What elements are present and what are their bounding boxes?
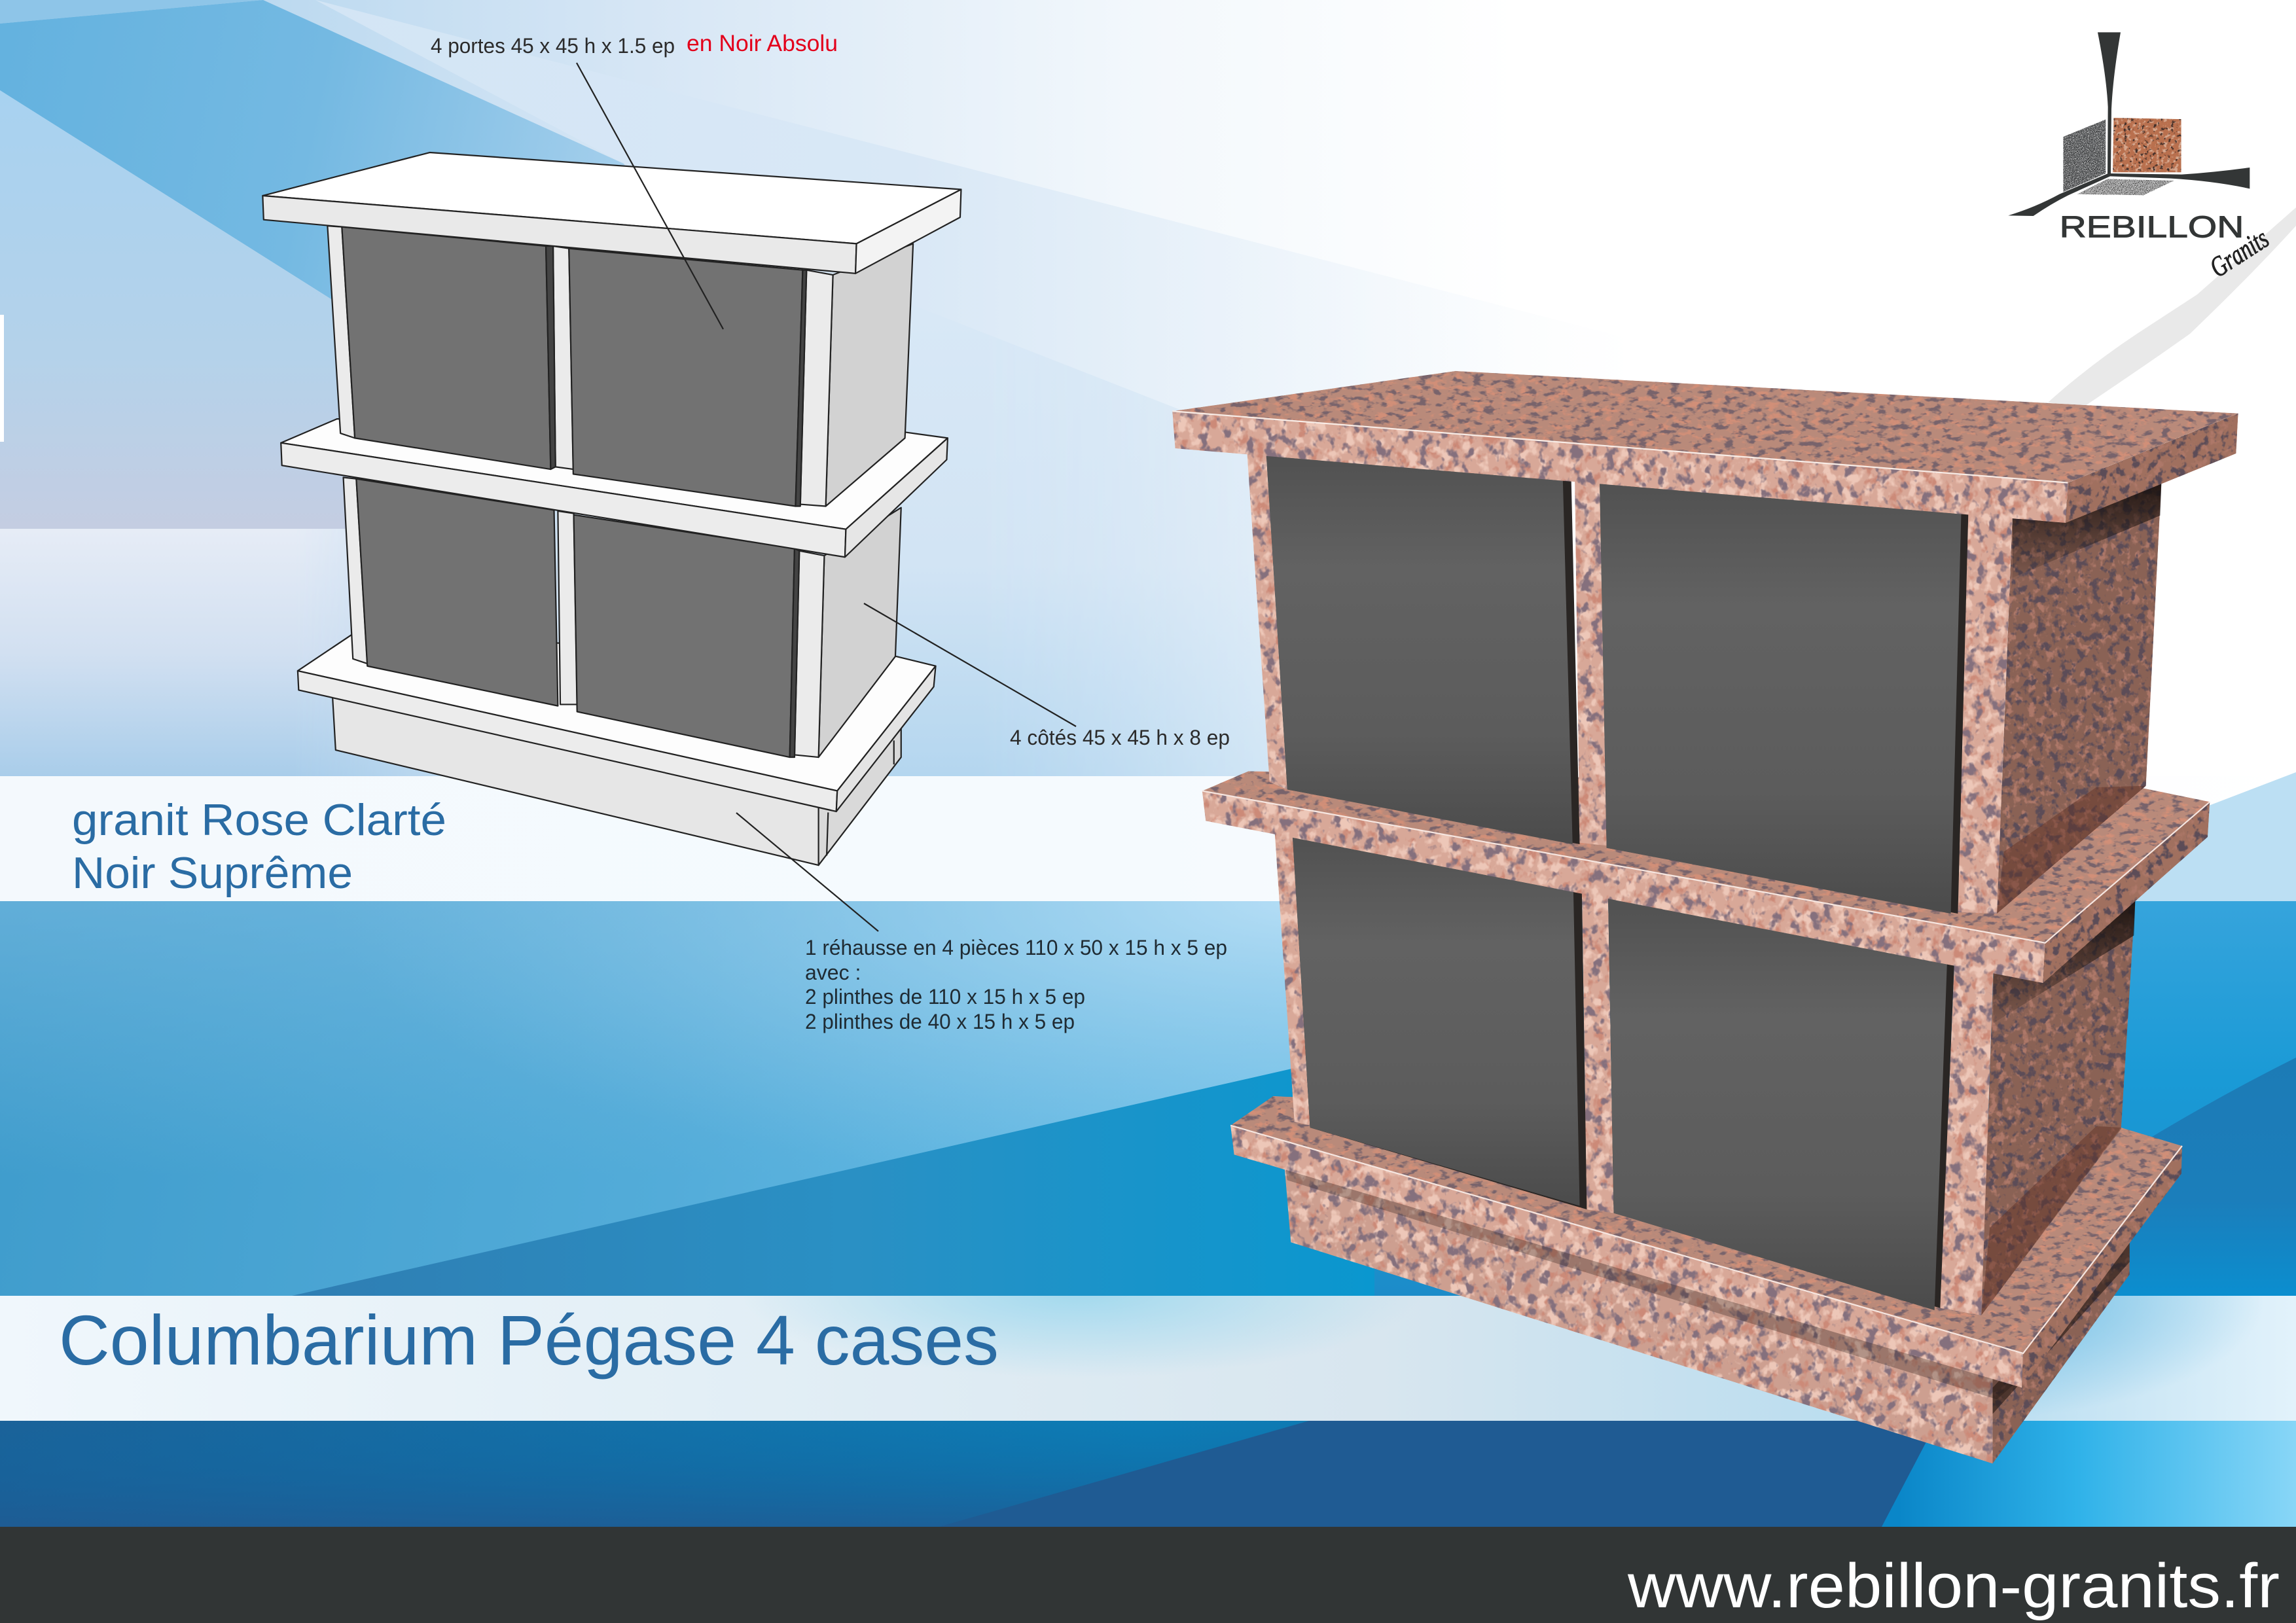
label: doors material: en Noir Absolu xyxy=(687,31,838,56)
label: plinth details: 2 plinthes de 110 x 15 h x 5 ep xyxy=(805,985,1085,1008)
upper right side panel xyxy=(1997,479,2162,914)
logo: floor swatch xyxy=(2077,179,2174,195)
website address: www.rebillon-granits.fr xyxy=(1627,1551,2280,1621)
lower pillars xyxy=(344,478,824,757)
middle slab xyxy=(1202,771,2210,983)
logo: grey wall swatch xyxy=(2063,119,2106,192)
lower right side panel xyxy=(819,508,901,757)
leader line: sides xyxy=(864,603,1076,726)
upper doors xyxy=(1266,450,1969,914)
lower doors xyxy=(356,479,799,757)
lower pillars xyxy=(1274,830,1994,1315)
upper pillars xyxy=(1247,450,2013,914)
label: plinth details: 1 réhausse en 4 pièces 110 x 50 x 15 h x 5 ep xyxy=(805,936,1227,959)
material heading: Noir Suprême xyxy=(72,848,353,898)
label: doors: 4 portes 45 x 45 h x 1.5 ep xyxy=(431,34,675,58)
line drawing of the columbarium xyxy=(262,152,961,865)
label: plinth details: avec : xyxy=(805,961,861,984)
upper pillars xyxy=(327,226,833,507)
bottom slab xyxy=(298,635,936,812)
logo: Rebillon Granits xyxy=(2008,32,2274,283)
material heading xyxy=(72,795,446,898)
logo: rust granite swatch xyxy=(2113,118,2181,172)
title: Columbarium Pégase 4 cases xyxy=(59,1300,999,1380)
bottom slab xyxy=(1230,1096,2182,1387)
leader line: doors xyxy=(577,63,723,329)
logo script: Granits xyxy=(2204,223,2274,283)
top slab xyxy=(1172,371,2238,523)
logo: arms xyxy=(2008,32,2250,216)
footer bar xyxy=(0,1527,2296,1623)
upper right side panel xyxy=(826,243,913,507)
granite columbarium render xyxy=(1172,371,2238,1463)
lower right side panel xyxy=(1981,899,2135,1315)
leader line: plinth xyxy=(736,813,878,931)
plinth xyxy=(1283,1158,2130,1463)
plinth xyxy=(332,692,901,865)
label: plinth details xyxy=(805,936,1227,1033)
material heading: granit Rose Clarté xyxy=(72,795,446,845)
lower doors xyxy=(1292,831,1954,1310)
label: sides: 4 côtés 45 x 45 h x 8 ep xyxy=(1010,726,1230,749)
middle slab xyxy=(281,419,948,557)
logo wordmark: REBILLON xyxy=(2060,210,2244,244)
top slab xyxy=(262,152,961,274)
upper doors xyxy=(342,227,806,507)
label: plinth details: 2 plinthes de 40 x 15 h x 5 ep xyxy=(805,1010,1075,1033)
